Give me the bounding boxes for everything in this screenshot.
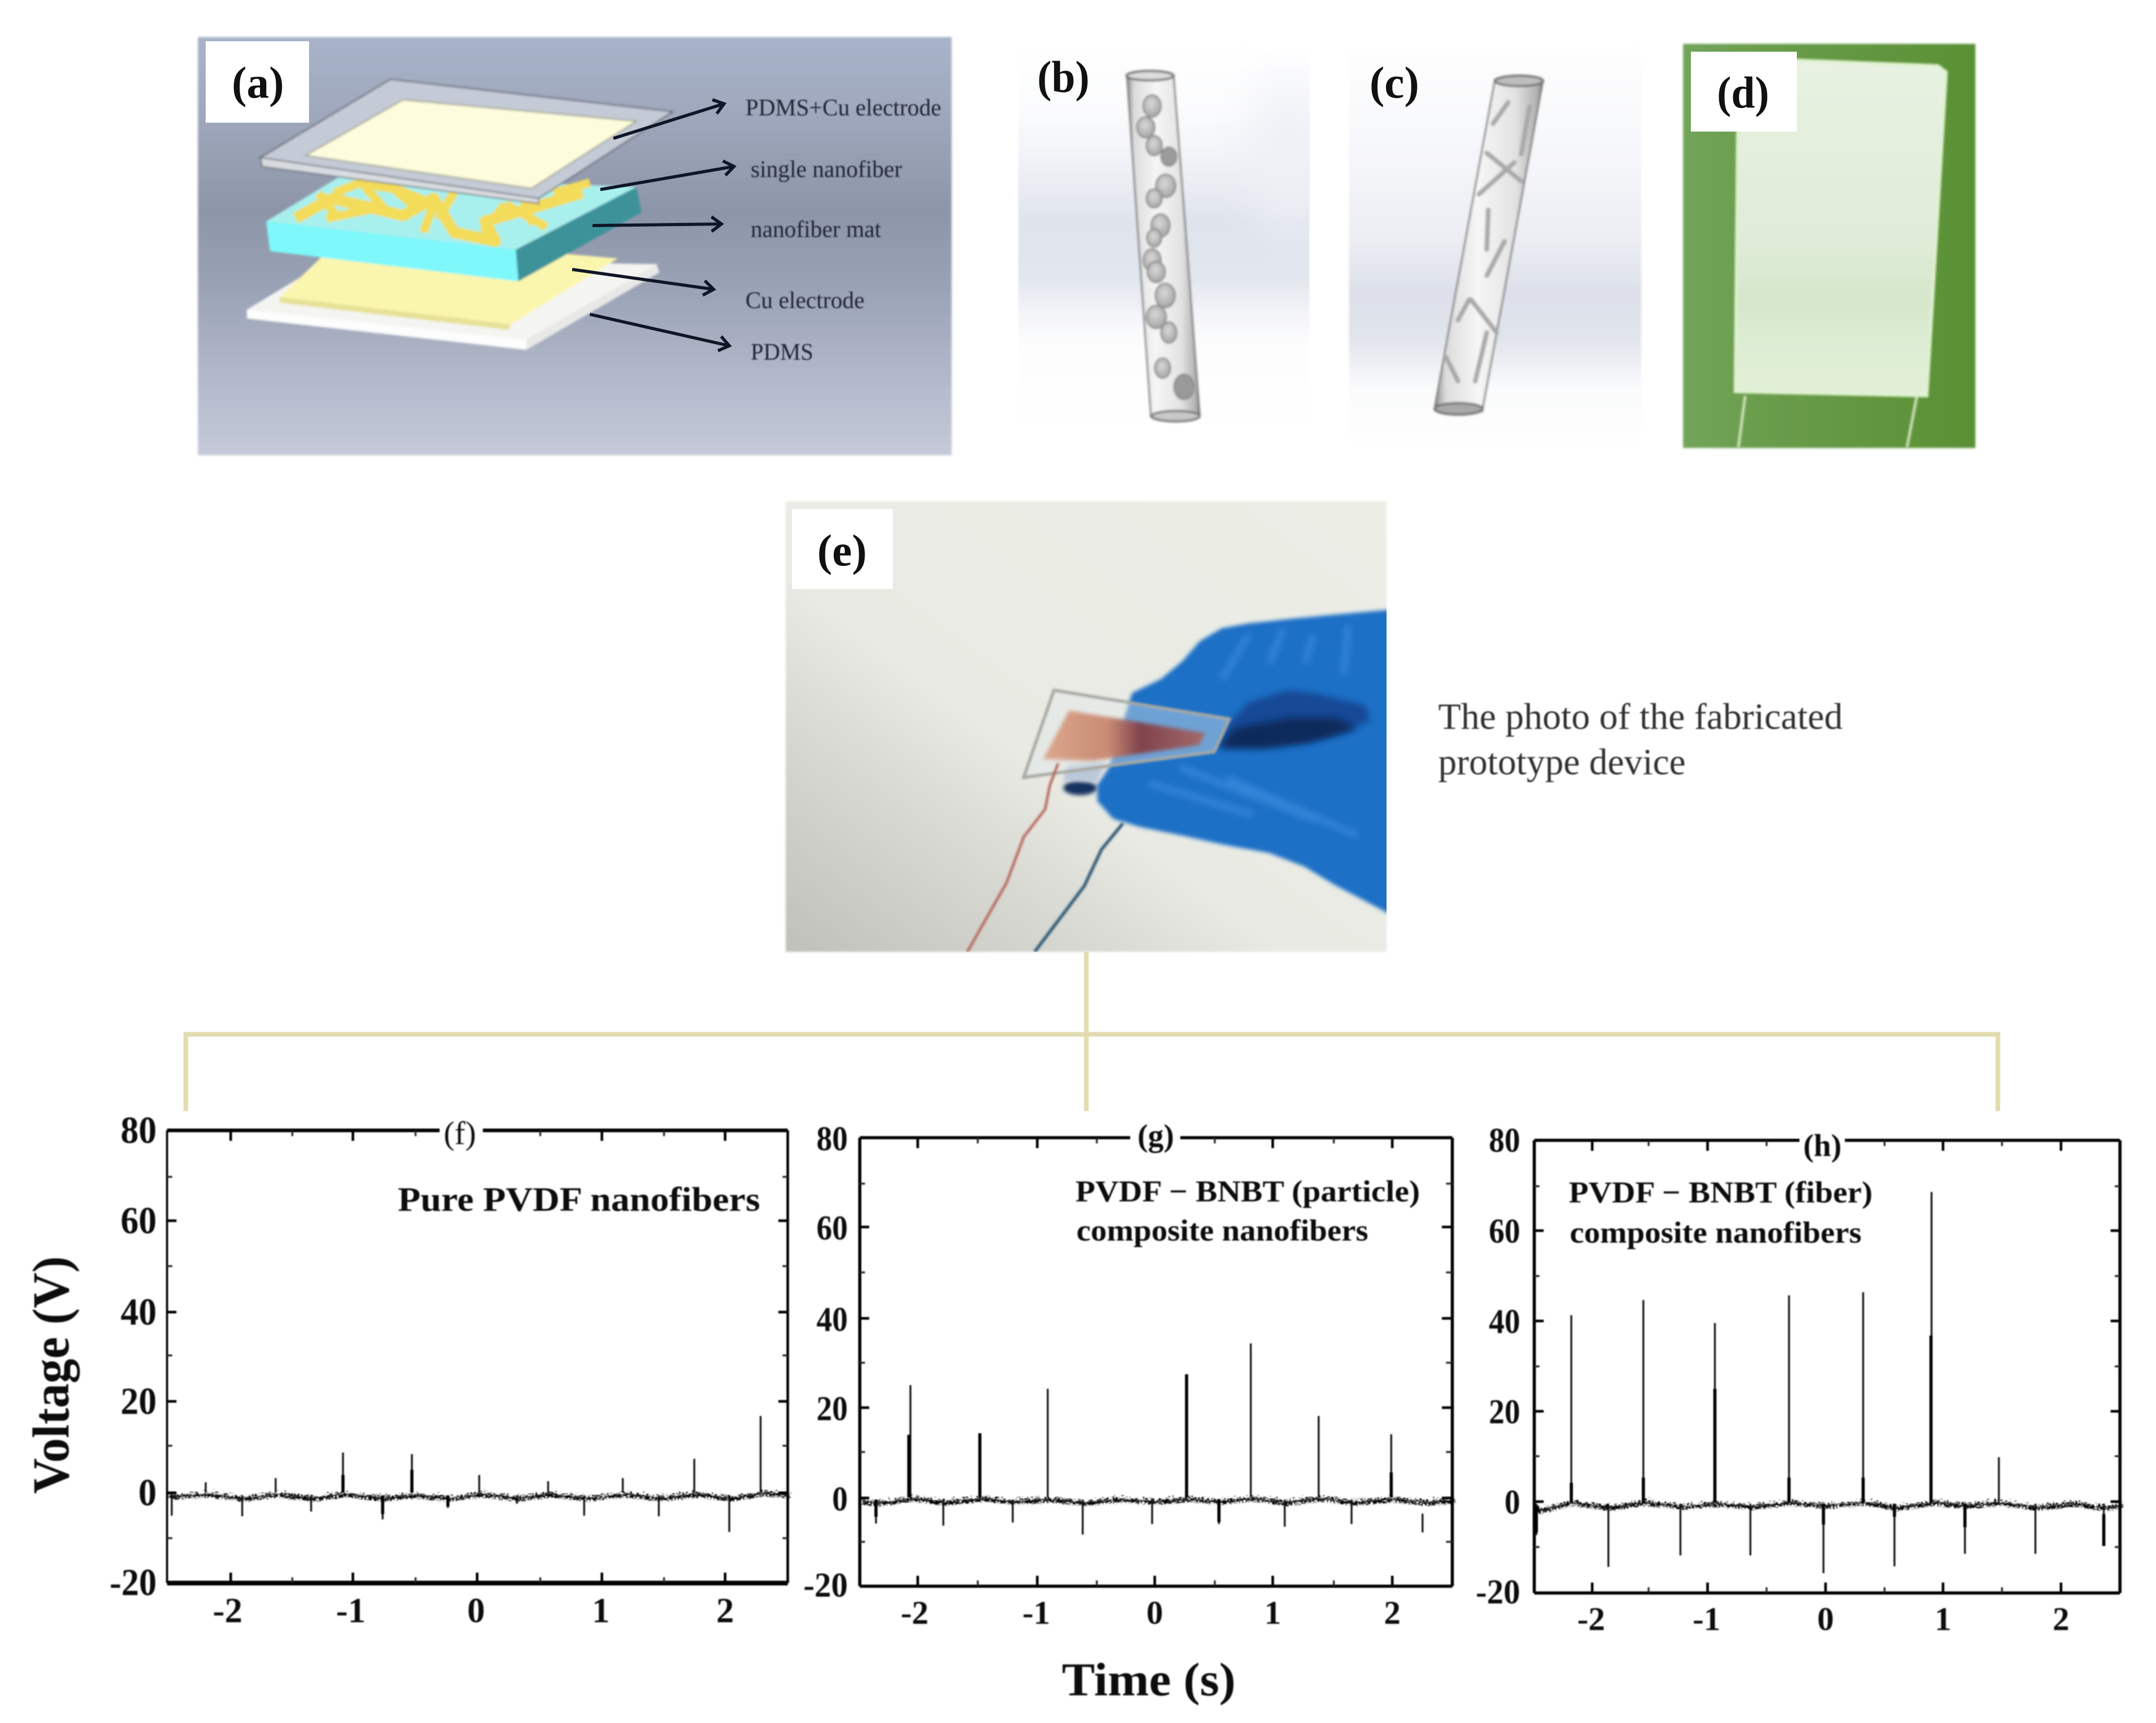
glove highlights — [1148, 626, 1357, 835]
description text: prototype device — [1438, 742, 1686, 783]
y tick labels f — [110, 1109, 157, 1603]
annotation g: composite nanofibers — [1076, 1213, 1368, 1247]
trace f — [167, 1416, 788, 1532]
chart title g: (g) — [1138, 1118, 1174, 1153]
annotation g: PVDF − BNBT (particle) — [1075, 1174, 1420, 1208]
panel b: nanofiber with particles — [1018, 61, 1310, 424]
x tick labels h: -2 — [1577, 1600, 1605, 1637]
label a: (a) — [232, 57, 284, 108]
panel a background — [198, 37, 952, 455]
y tick labels g: 60 — [816, 1209, 848, 1247]
x tick labels g: 0 — [1146, 1594, 1163, 1631]
fiber with particles — [1127, 71, 1200, 421]
plot frame f — [167, 1130, 788, 1583]
x tick labels f: 0 — [467, 1590, 485, 1630]
blue glove — [1099, 612, 1389, 911]
x tick labels f: -2 — [213, 1590, 242, 1630]
y tick labels h: 60 — [1489, 1212, 1520, 1250]
label e: (e) — [818, 525, 867, 575]
y tick labels f: 0 — [138, 1471, 157, 1514]
device layers — [247, 79, 672, 350]
y tick labels f: -20 — [110, 1561, 157, 1603]
label c: (c) — [1370, 57, 1419, 108]
x tick labels h: 1 — [1935, 1600, 1951, 1637]
y tick labels h: 20 — [1489, 1392, 1520, 1431]
label e — [792, 509, 893, 589]
chart g: particle composite voltage — [803, 1118, 1452, 1631]
chart title f: (f) — [444, 1116, 476, 1151]
y tick labels g: 20 — [816, 1389, 848, 1428]
x tick labels h: 2 — [2053, 1600, 2069, 1637]
label a — [206, 41, 309, 123]
trace g — [860, 1343, 1452, 1535]
fingertip — [1063, 781, 1097, 795]
y tick labels h: 80 — [1489, 1121, 1520, 1160]
annotation g — [1075, 1174, 1420, 1247]
panel b background — [1018, 84, 1310, 324]
trace h — [1534, 1192, 2120, 1573]
panel d: nanofiber mat photo — [1683, 44, 1975, 448]
copper electrode — [1043, 711, 1205, 761]
label b: (b) — [1037, 52, 1089, 102]
layer labels: single nanofiber — [751, 156, 902, 182]
fiber mat and wires — [1735, 58, 1946, 447]
x tick labels h: -1 — [1692, 1600, 1721, 1637]
annotation f: Pure PVDF nanofibers — [398, 1181, 760, 1219]
x tick labels f: -1 — [336, 1590, 365, 1630]
chart f: pure PVDF voltage — [110, 1109, 788, 1630]
y tick labels g: 40 — [816, 1300, 848, 1339]
x axis title: Time (s) — [1062, 1654, 1236, 1706]
x tick labels f: 1 — [592, 1590, 610, 1630]
x tick labels f: 2 — [716, 1590, 734, 1630]
y tick labels f: 60 — [121, 1199, 157, 1242]
label d: (d) — [1717, 67, 1769, 117]
x tick labels g: -1 — [1022, 1594, 1050, 1631]
photo background — [786, 501, 1387, 952]
x tick labels g: 1 — [1264, 1594, 1281, 1631]
annotation h: PVDF − BNBT (fiber) — [1569, 1175, 1873, 1209]
annotation h: composite nanofibers — [1570, 1215, 1862, 1249]
x tick labels h: 0 — [1817, 1600, 1834, 1637]
fiber with rods — [1435, 76, 1543, 415]
panel c background — [1349, 37, 1641, 455]
panel c: nanofiber with embedded rods — [1349, 37, 1641, 455]
annotation h — [1569, 1175, 1873, 1249]
blue wire — [1035, 823, 1123, 952]
red wire — [967, 763, 1058, 952]
x tick labels f — [213, 1590, 734, 1630]
x tick labels g: -2 — [901, 1594, 929, 1631]
panel e: photo of prototype device — [786, 501, 1389, 952]
chart title h: (h) — [1803, 1128, 1842, 1163]
glove shadow between fingers — [1218, 690, 1370, 748]
transparent device — [1024, 690, 1229, 777]
x tick labels h — [1577, 1600, 2069, 1637]
y tick labels f: 80 — [121, 1109, 157, 1151]
connector bracket — [186, 952, 1998, 1111]
y tick labels g — [803, 1119, 848, 1604]
layer labels: PDMS+Cu electrode — [745, 94, 941, 121]
plot frame g — [860, 1138, 1452, 1586]
y tick labels f: 40 — [121, 1291, 157, 1333]
y tick labels g: -20 — [803, 1566, 848, 1604]
x tick labels g: 2 — [1384, 1594, 1401, 1631]
y axis title: Voltage (V) — [22, 1256, 80, 1494]
y tick labels g: 0 — [832, 1480, 848, 1518]
label d — [1691, 52, 1797, 132]
x tick labels g — [901, 1594, 1401, 1631]
hand, device and wires — [967, 612, 1389, 952]
layer labels — [745, 94, 941, 365]
y tick labels g: 80 — [816, 1119, 848, 1158]
y tick labels h: -20 — [1476, 1573, 1520, 1611]
y tick labels h: 0 — [1505, 1483, 1520, 1521]
layer labels: PDMS — [751, 338, 813, 365]
arrows to layer labels — [572, 104, 733, 346]
layer labels: nanofiber mat — [751, 216, 881, 242]
plastic edge near fingertip — [1063, 761, 1106, 782]
description text: The photo of the fabricated — [1438, 697, 1843, 737]
green backdrop — [1683, 44, 1975, 448]
description text — [1438, 697, 1843, 783]
y tick labels f: 20 — [121, 1380, 157, 1422]
layer labels: Cu electrode — [745, 287, 864, 313]
y tick labels h — [1476, 1121, 1520, 1611]
y tick labels h: 40 — [1489, 1302, 1520, 1341]
chart h: fiber composite voltage — [1476, 1121, 2120, 1637]
plot frame h — [1534, 1140, 2120, 1593]
panel a: exploded device diagram — [198, 37, 952, 455]
